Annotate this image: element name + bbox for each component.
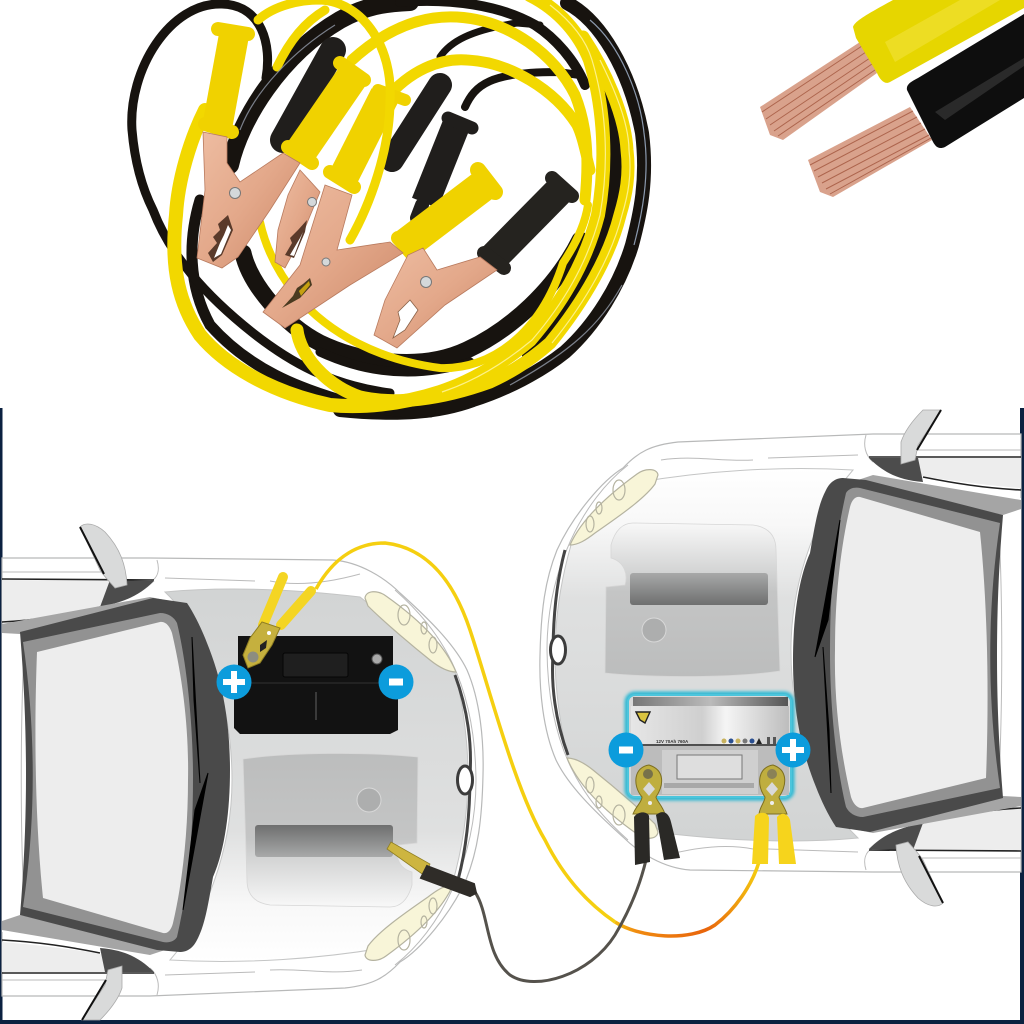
clamp: ground clamp on engine block [387, 842, 476, 896]
cable: heated section of positive lead [615, 862, 759, 936]
inner body lines [2, 560, 476, 995]
clamp: negative clamp on good battery [633, 765, 680, 865]
badge: plus on good battery [776, 732, 810, 768]
badge: minus on left battery [378, 664, 414, 700]
panel: diagram background and navy frame [0, 408, 1024, 1024]
yellow clamp handles [205, 29, 495, 254]
engine cover slot [255, 825, 393, 857]
battery rating text: 12V 70Ah 760A [656, 739, 689, 744]
clamp: positive clamp on left battery [243, 577, 311, 668]
cowl and washer [455, 675, 470, 880]
black cables [132, 1, 644, 413]
hood [165, 589, 468, 961]
headlights [365, 592, 456, 960]
windshield inner frame [23, 613, 193, 942]
photo: coiled jumper cables with clamps [132, 0, 646, 413]
car: right vehicle with good battery [540, 410, 1021, 906]
clamp teeth and rivets [208, 188, 432, 338]
car: left vehicle with dead battery [2, 524, 483, 1020]
mirrors [80, 524, 127, 588]
battery: good battery with cyan highlight [627, 694, 792, 798]
cable: yellow positive lead [316, 543, 615, 922]
black front handle [484, 178, 572, 268]
black clamp handles behind [283, 50, 472, 218]
battery: dead battery on left car [234, 636, 398, 734]
battery icons [722, 737, 776, 744]
engine cover [243, 753, 418, 907]
badge: plus on left battery [216, 664, 252, 700]
battery label [631, 706, 789, 745]
cable: black ground lead [475, 860, 646, 982]
black cable jacket [907, 14, 1024, 148]
battery logo [636, 712, 650, 723]
roof edge [2, 626, 23, 932]
yellow loop in front of clamp handle [258, 0, 390, 240]
battery top strip [633, 697, 788, 706]
yellow cables [174, 0, 628, 406]
clamp: positive clamp on good battery [752, 765, 796, 864]
side windows [2, 580, 155, 622]
copper strands [760, 42, 877, 140]
car body outline [2, 558, 483, 996]
battery lower case [631, 746, 789, 795]
copper clamp jaws [197, 132, 497, 348]
photo: stripped cable ends, yellow and black [760, 0, 1024, 197]
engine cover cap [357, 788, 381, 812]
yellow cable jacket [853, 0, 1024, 83]
battery lower window [677, 755, 742, 779]
wiper creases [183, 637, 208, 910]
windshield glass [35, 622, 188, 933]
badge: minus on good battery [608, 732, 644, 768]
windshield frame [20, 598, 230, 952]
cable highlights [240, 5, 646, 392]
